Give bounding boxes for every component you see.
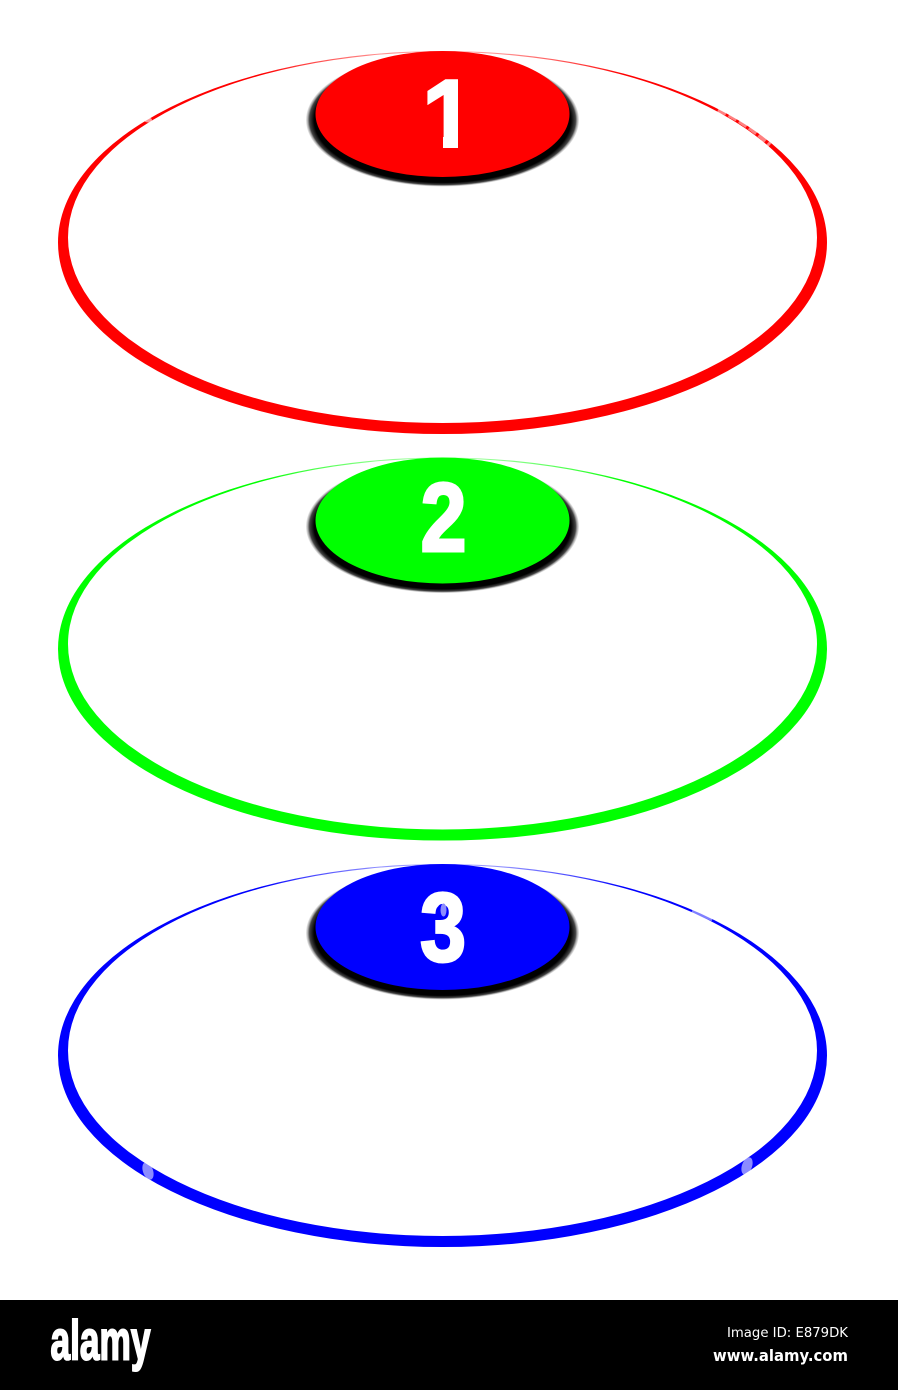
ring 3: blue ellipse <box>58 864 827 1247</box>
ring 2: green ellipse <box>58 458 827 841</box>
image id: Image ID: E879DK <box>727 1325 849 1341</box>
badge 3: blue oval with number <box>306 864 579 1000</box>
badge 1: red oval with number: 1 <box>422 60 477 170</box>
badge 1: red oval with number <box>306 51 579 186</box>
badge 2: green oval with number <box>306 458 579 593</box>
badge 3: blue oval with number: 3 <box>420 875 466 983</box>
badge 2: green oval with number: 2 <box>421 465 466 573</box>
website: www.alamy.com <box>713 1346 848 1365</box>
ring 1: red ellipse <box>58 51 827 434</box>
footer logo: alamy <box>50 1308 150 1372</box>
footer bar <box>0 1300 898 1390</box>
